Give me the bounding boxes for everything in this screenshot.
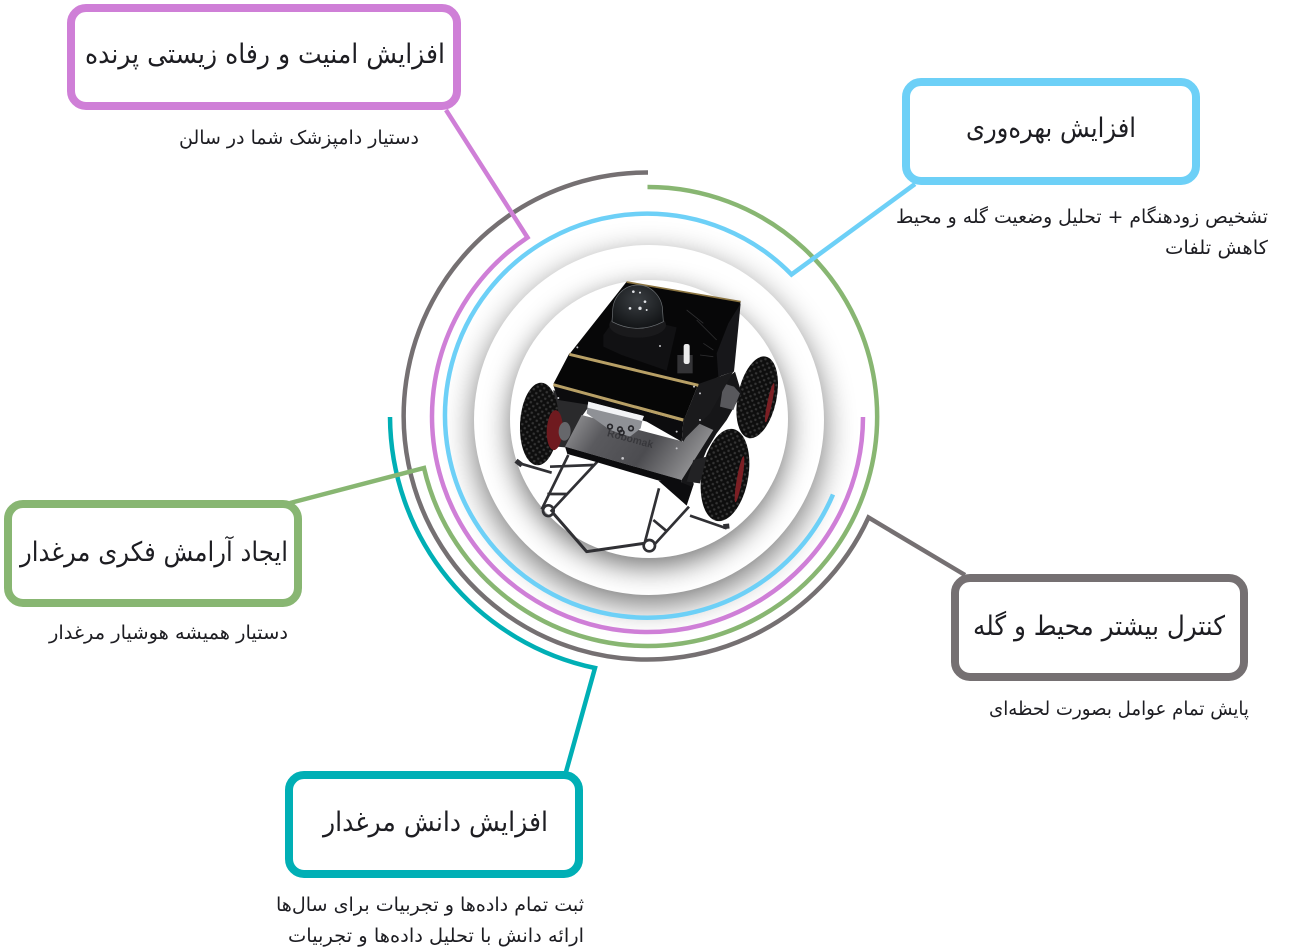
robot: scratch highlights (687, 310, 717, 357)
text: environment detail: پایش تمام عوامل بصورت لحظه‌ای (989, 698, 1249, 720)
arc: gray (404, 172, 965, 659)
box (71, 8, 457, 106)
arc: blue (445, 184, 915, 618)
robot: bolts (557, 345, 701, 460)
text: farmer knowledge detail (276, 894, 584, 947)
box (289, 775, 579, 874)
heading: افزایش امنیت و رفاه زیستی پرنده (85, 39, 445, 70)
robot: front right wheel (694, 425, 756, 525)
panel: bird safety (71, 8, 457, 106)
box (906, 82, 1196, 181)
robot: back right wheel (730, 353, 785, 442)
robot: motor mount (687, 457, 707, 483)
robot: dome (609, 285, 666, 338)
arc: teal (390, 417, 595, 772)
robot: front panel (553, 353, 698, 422)
heading: افزایش دانش مرغدار (321, 807, 548, 838)
text: farmer knowledge detail: ارائه دانش با تحلیل داده‌ها و تجربیات (288, 925, 584, 947)
text: bird safety detail: دستیار دامپزشک شما در سالن (179, 127, 419, 149)
text: productivity detail (896, 205, 1269, 259)
robot: bumper frame (516, 455, 729, 552)
panel: peace of mind (8, 504, 298, 603)
robot: right bracket (658, 481, 694, 506)
robot: gold strips (553, 354, 698, 420)
robot: rear left hardware (553, 390, 590, 447)
heading: افزایش بهره‌وری (966, 113, 1136, 144)
panel: environment control (955, 578, 1244, 677)
heading: کنترل بیشتر محیط و گله (973, 610, 1225, 642)
robot photo illustration (516, 282, 785, 552)
robot: plate lip (565, 447, 682, 485)
box (955, 578, 1244, 677)
robot: upper body (553, 282, 741, 460)
robot: chassis plate (565, 415, 713, 480)
heading: ایجاد آرامش فکری مرغدار (18, 536, 288, 568)
robot: black side frame (682, 372, 742, 487)
text: productivity detail: کاهش تلفات (1165, 237, 1269, 259)
arc: green (290, 187, 877, 646)
central disc with shadows (473, 245, 825, 606)
robot: top strip (627, 282, 741, 302)
robot: white panel (587, 402, 644, 437)
text: peace of mind detail: دستیار همیشه هوشیار مرغدار (48, 622, 288, 644)
text: farmer knowledge detail: ثبت تمام داده‌ها و تجربیات برای سال‌ها (276, 894, 584, 916)
panel: productivity (906, 82, 1196, 181)
robot: white sensor (677, 344, 693, 373)
panel: farmer knowledge (289, 775, 579, 874)
robot: lower chassis and wheels (516, 353, 785, 552)
text: productivity detail: تشخیص زودهنگام + تحلیل وضعیت گله و محیط (896, 205, 1268, 228)
arc: magenta (432, 110, 863, 632)
robot: camera base (603, 323, 677, 371)
box (8, 504, 298, 603)
robot: body top (570, 282, 741, 387)
robot: brand label: Robomak (606, 428, 654, 451)
robot: left wheel (518, 382, 573, 467)
